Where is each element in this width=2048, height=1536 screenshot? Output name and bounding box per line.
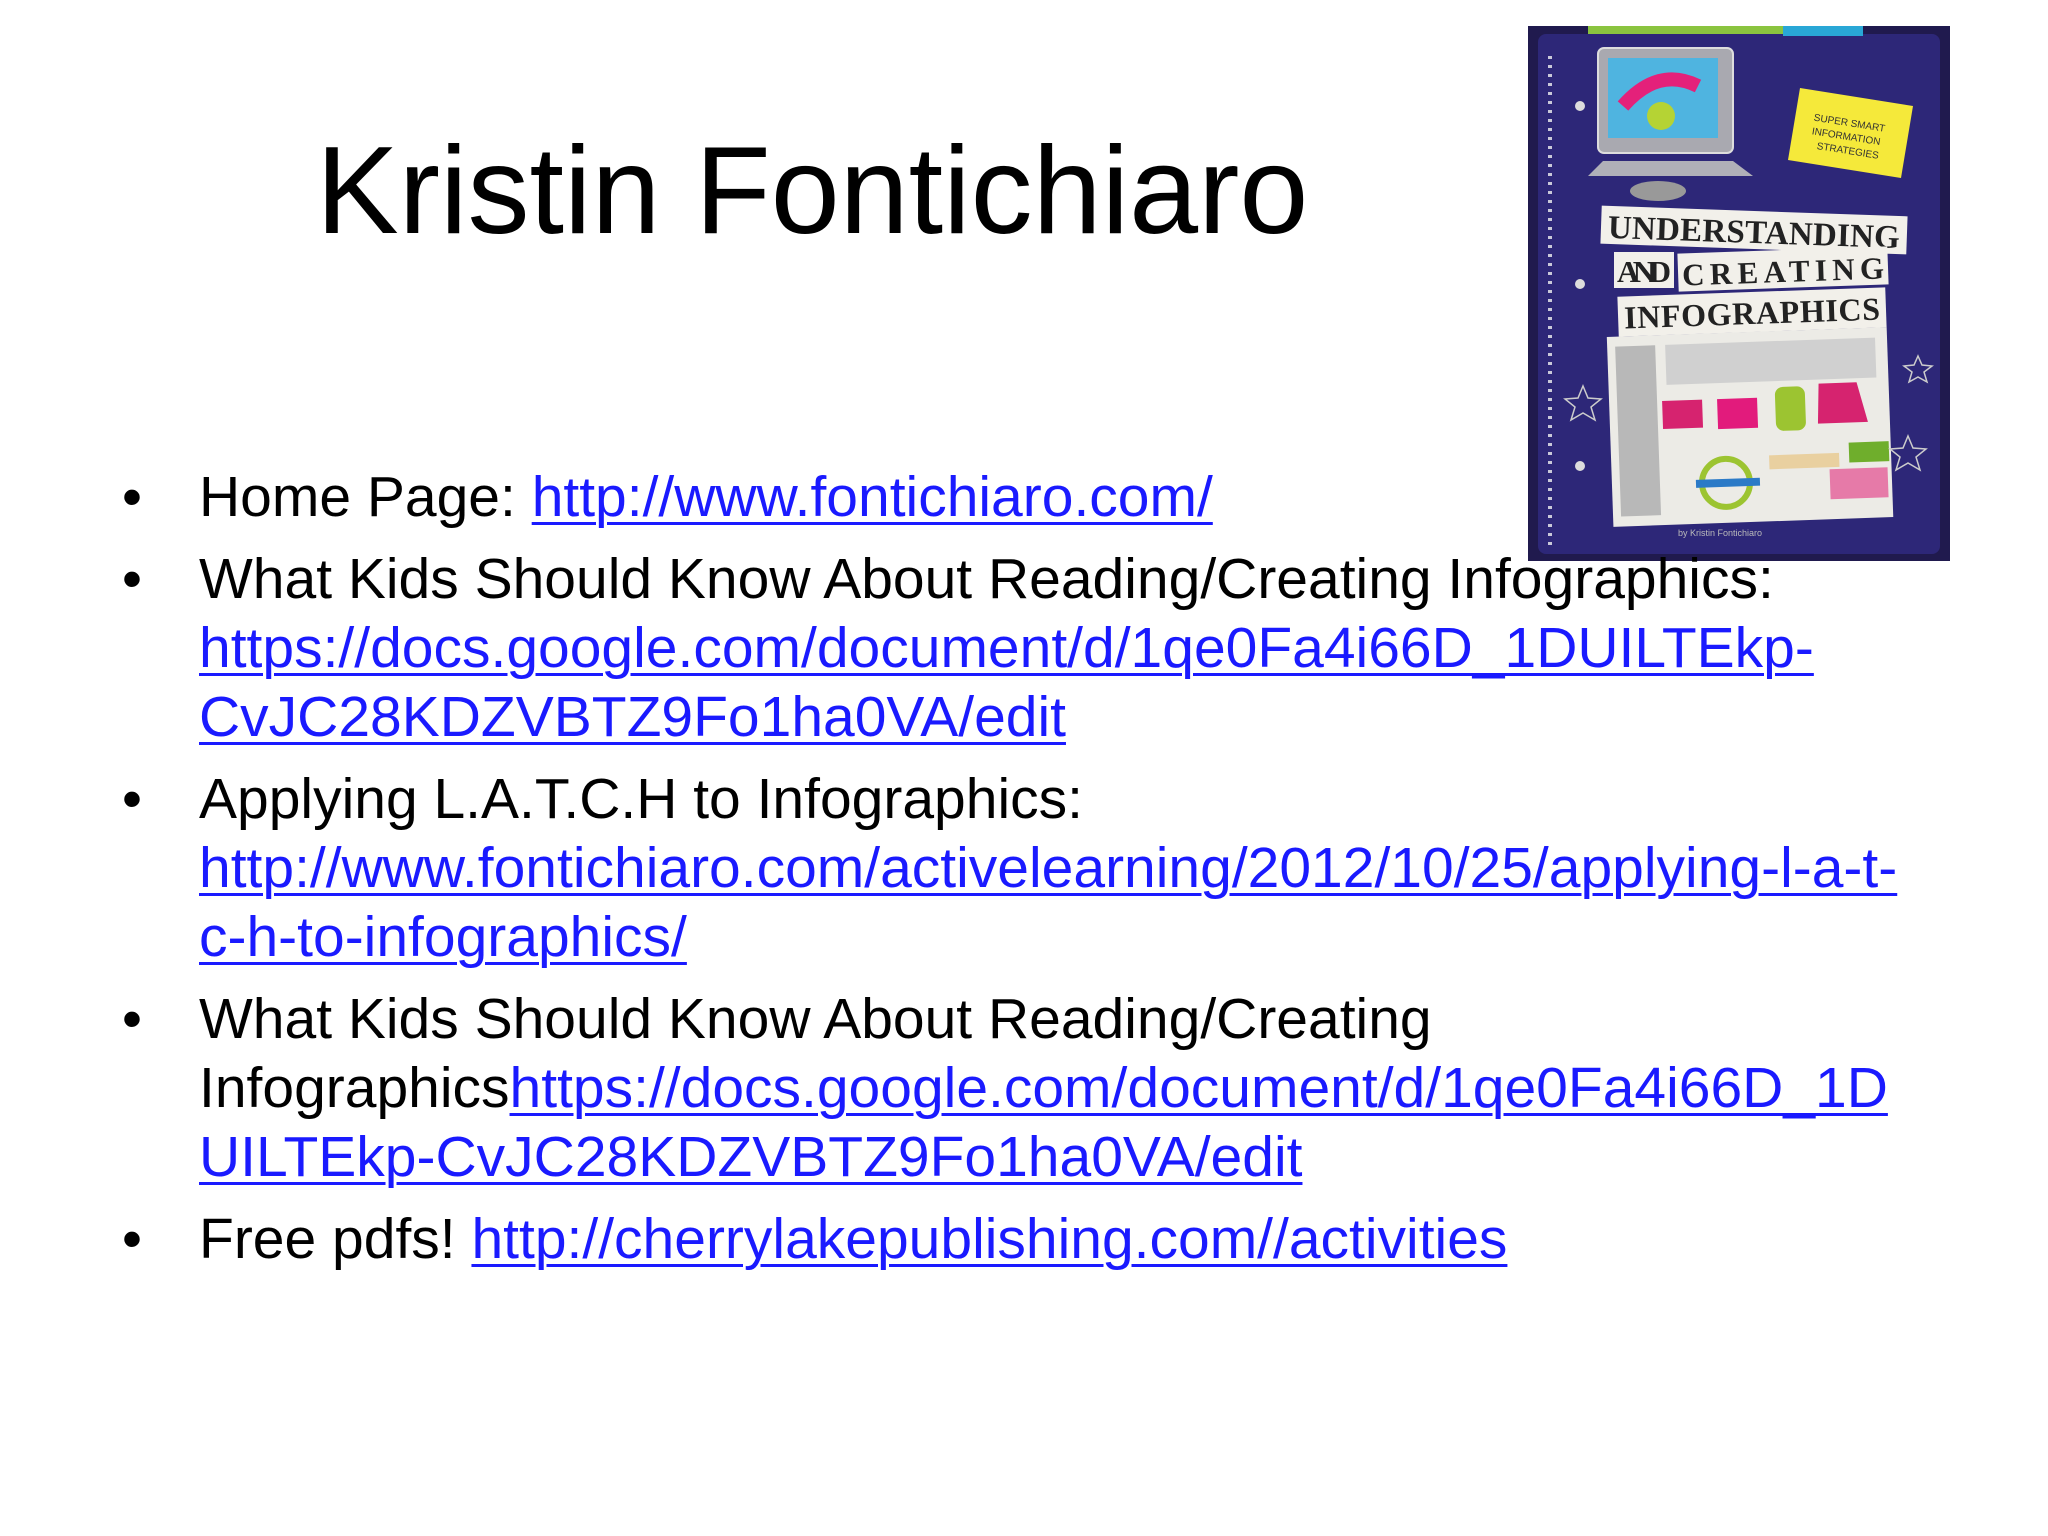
yellow note — [1788, 88, 1913, 178]
title banners: CREATING — [1682, 250, 1885, 293]
book cover image: by Kristin Fontichiaro — [1678, 528, 1762, 538]
bullet list: Home Page: http://www.fontichiaro.com/ — [199, 465, 1213, 529]
book cover image — [1528, 26, 1950, 561]
bullet 2 — [122, 547, 1814, 749]
bullet list: http://www.fontichiaro.com/activelearning/2012/10/25/applying-l-a-t- — [199, 836, 1897, 900]
title banners: AND — [1617, 254, 1671, 289]
bullet list: • — [122, 987, 142, 1051]
bullet list: • — [122, 767, 142, 831]
bullet list: CvJC28KDZVBTZ9Fo1ha0VA/edit — [199, 685, 1066, 749]
bullet 1: home page — [122, 465, 1213, 529]
title: Kristin Fontichiaro — [316, 122, 1308, 260]
bullet list: • — [122, 547, 142, 611]
monitor — [1588, 48, 1753, 201]
bullet list: Applying L.A.T.C.H to Infographics: — [199, 767, 1083, 831]
inner infographic page — [1607, 327, 1893, 527]
yellow note: SUPER SMART — [1813, 113, 1886, 135]
bullet list: What Kids Should Know About Reading/Creating — [199, 987, 1432, 1051]
bullet list: What Kids Should Know About Reading/Creating Infographics: — [199, 547, 1774, 611]
bullet list: • — [122, 1207, 142, 1271]
yellow note: INFORMATION — [1811, 126, 1881, 148]
bullet 4 — [122, 987, 1888, 1189]
bullet 5 — [122, 1207, 1508, 1271]
bullet 3 — [122, 767, 1898, 969]
bullet list: • — [122, 465, 142, 529]
bullet list: c-h-to-infographics/ — [199, 905, 687, 969]
bullet list: https://docs.google.com/document/d/1qe0Fa4i66D_1DUILTEkp- — [199, 616, 1814, 680]
title banners: INFOGRAPHICS — [1623, 291, 1881, 335]
bullet list: Free pdfs! http://cherrylakepublishing.com//activities — [199, 1207, 1507, 1271]
bullet list: Infographicshttps://docs.google.com/document/d/1qe0Fa4i66D_1D — [199, 1056, 1888, 1120]
title banners: UNDERSTANDING — [1607, 210, 1900, 256]
stars — [1565, 356, 1932, 470]
yellow note: STRATEGIES — [1816, 141, 1880, 162]
title banners — [1600, 206, 1908, 337]
bullet list: UILTEkp-CvJC28KDZVBTZ9Fo1ha0VA/edit — [199, 1125, 1302, 1189]
